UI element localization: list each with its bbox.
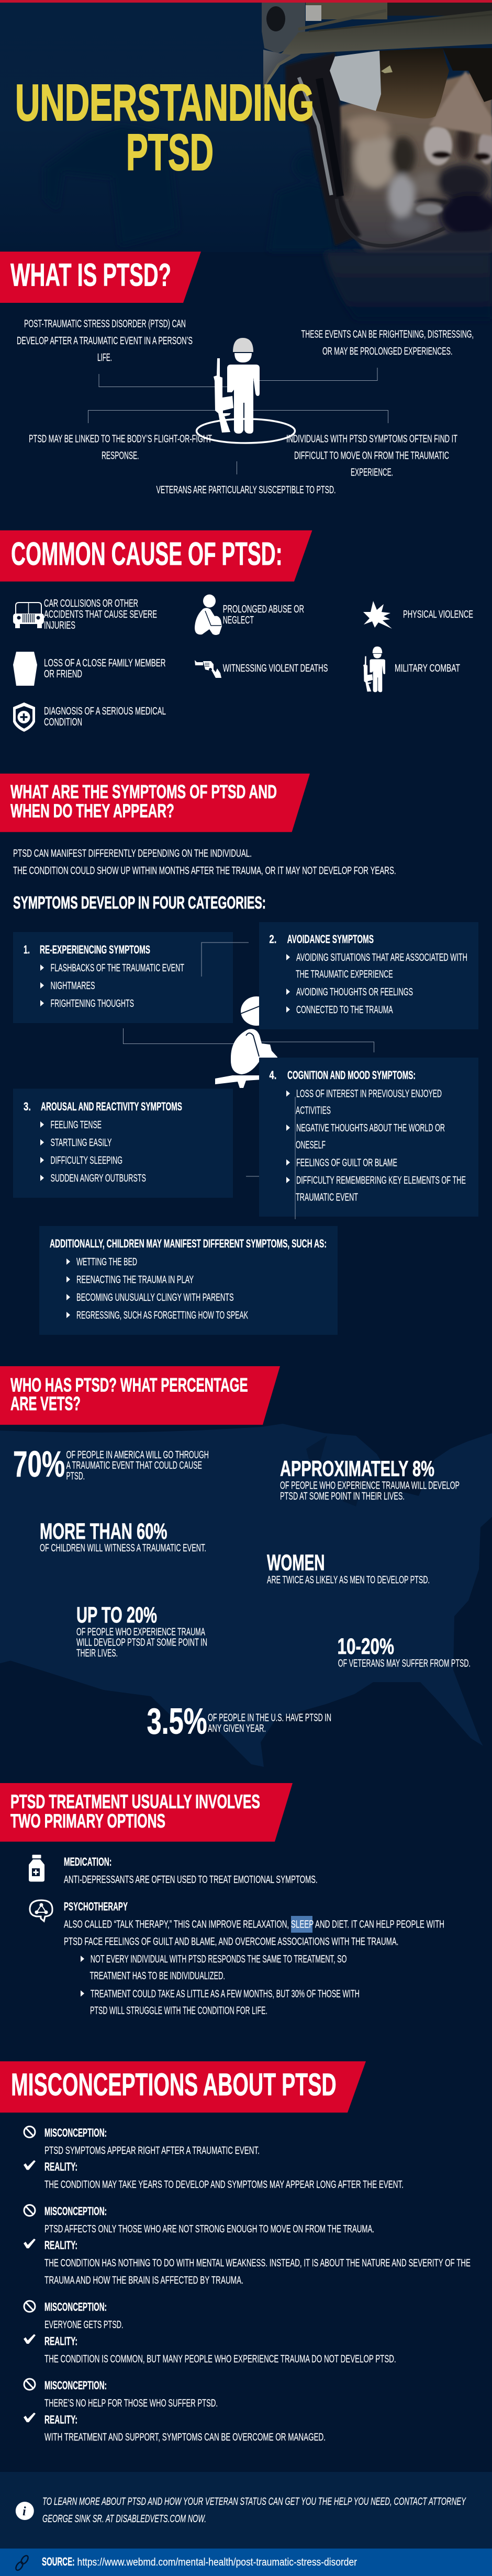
panel: arousal and reactivity symptoms xyxy=(13,1089,233,1198)
misconception label: MISCONCEPTION: xyxy=(44,2379,107,2392)
heading: treatment: TWO PRIMARY OPTIONS xyxy=(10,1810,165,1832)
stat: approximately 8 percent: PTSD AT SOME POINT IN THEIR LIVES. xyxy=(280,1490,405,1502)
panel title: AVOIDANCE SYMPTOMS xyxy=(287,933,374,946)
text: loss of family: OR FRIEND xyxy=(44,668,82,680)
misconception label: MISCONCEPTION: xyxy=(44,2126,107,2139)
symptom list: ACTIVITIES xyxy=(296,1104,331,1116)
heading: treatment xyxy=(0,1783,293,1842)
text: diagnosis: DIAGNOSIS OF A SERIOUS MEDICAL xyxy=(44,705,166,717)
reality text: TRAUMA AND HOW THE BRAIN IS AFFECTED BY TRAUMA. xyxy=(44,2274,243,2286)
source bar xyxy=(0,2548,492,2576)
reality label: REALITY: xyxy=(44,2413,77,2426)
text: events xyxy=(301,328,474,357)
connector line xyxy=(202,943,249,977)
face base xyxy=(335,68,492,252)
connector lines xyxy=(124,1028,374,1176)
panel title: 3. xyxy=(24,1100,31,1113)
text: military combat: MILITARY COMBAT xyxy=(395,662,460,674)
misconception 3 xyxy=(24,2300,396,2365)
icon: brain xyxy=(30,1900,52,1921)
symptom list: REGRESSING, SUCH AS FORGETTING HOW TO SPEAK xyxy=(76,1309,248,1321)
reality label: REALITY: xyxy=(44,2239,77,2252)
text: flight or fight: RESPONSE. xyxy=(102,450,139,461)
text: diagnosis: CONDITION xyxy=(44,716,82,728)
stat: 70 percent: 70% xyxy=(13,1444,65,1484)
text: car collisions xyxy=(44,597,157,631)
icon: prohibited xyxy=(24,2379,35,2390)
nose bridge skin xyxy=(429,71,492,136)
text: intro xyxy=(13,847,396,877)
heading: who has PTSD xyxy=(0,1366,280,1425)
helmet cord xyxy=(337,199,445,246)
source text: SOURCE: xyxy=(42,2555,75,2568)
stat: 3.5 percent: OF PEOPLE IN THE U.S. HAVE PTSD IN xyxy=(208,1712,331,1724)
icon: info: i xyxy=(23,2505,26,2518)
section: common causes xyxy=(0,530,473,732)
stat: women: WOMEN xyxy=(267,1550,325,1575)
symptom list: REENACTING THE TRAUMA IN PLAY xyxy=(76,1274,194,1286)
heading: treatment: PTSD TREATMENT USUALLY INVOLVES xyxy=(10,1791,260,1812)
icon: info xyxy=(16,2502,34,2520)
misconception text: THERE’S NO HELP FOR THOSE WHO SUFFER PTSD. xyxy=(44,2397,218,2409)
reality label: REALITY: xyxy=(44,2335,77,2347)
icon: sitting person xyxy=(195,594,222,635)
stat: up to 20 percent: WILL DEVELOP PTSD AT SOME POINT IN xyxy=(76,1636,207,1649)
lens glare patch xyxy=(330,51,381,111)
icon: jeep xyxy=(13,603,44,628)
text: medication: MEDICATION: xyxy=(64,1855,111,1868)
symptom list: DIFFICULTY SLEEPING xyxy=(50,1154,122,1166)
heading: who has PTSD: WHO HAS PTSD? WHAT PERCENTAGE xyxy=(10,1374,248,1395)
top red bar xyxy=(0,0,492,3)
text: prolonged abuse: NEGLECT xyxy=(223,614,254,626)
icon: check xyxy=(24,2160,36,2170)
helmet cords xyxy=(298,10,386,29)
text: car collisions: CAR COLLISIONS OR OTHER xyxy=(44,597,138,609)
stat: 10-20 percent: 10-20% xyxy=(337,1634,394,1659)
text: flight or fight: PTSD MAY BE LINKED TO THE BODY’S FLIGHT-OR-FIGHT xyxy=(29,433,212,445)
chin strap xyxy=(299,77,331,195)
text: witnessing violent deaths: WITNESSING VIOLENT DEATHS xyxy=(223,662,328,674)
panel title xyxy=(269,933,374,946)
helmet velcro patch xyxy=(306,3,387,19)
right lens and bridge xyxy=(443,48,492,102)
icon: coffin xyxy=(13,652,37,686)
text: medication: ANTI-DEPRESSANTS ARE OFTEN USED TO TREAT EMOTIONAL SYMPTOMS. xyxy=(64,1874,318,1886)
panel title: 1. xyxy=(24,943,30,956)
highlight: sleep xyxy=(291,1916,312,1933)
misconception 2 xyxy=(24,2205,471,2286)
heading: symptoms xyxy=(0,774,310,832)
icon: prohibited xyxy=(24,2127,35,2137)
connector line xyxy=(295,1097,296,1219)
text: flight or fight xyxy=(29,433,212,461)
panel: cognition and mood symptoms xyxy=(259,1058,478,1219)
panel title xyxy=(269,1069,416,1082)
helmet top dark xyxy=(387,3,492,16)
icon: medical shield xyxy=(13,702,35,732)
heading: who has PTSD: ARE VETS? xyxy=(10,1393,81,1414)
text: definition: POST-TRAUMATIC STRESS DISORDER (PTSD) CAN xyxy=(24,318,186,330)
symptom list: BECOMING UNUSUALLY CLINGY WITH PARENTS xyxy=(76,1291,234,1303)
title: UNDERSTANDING xyxy=(15,74,314,131)
symptom list: AVOIDING THOUGHTS OR FEELINGS xyxy=(296,986,413,998)
treatment notes list xyxy=(81,1953,360,2016)
panel: avoidance symptoms xyxy=(259,922,478,1029)
text: prolonged abuse xyxy=(223,603,304,626)
neck under cord xyxy=(351,230,492,252)
hero photo: soldier face with helmet xyxy=(262,3,492,319)
heading: what is PTSD: WHAT IS PTSD? xyxy=(10,257,171,293)
misconception label: MISCONCEPTION: xyxy=(44,2205,107,2218)
icon: link xyxy=(15,2555,29,2571)
symptom list: FRIGHTENING THOUGHTS xyxy=(50,997,134,1009)
section: symptoms xyxy=(0,774,478,1335)
text: definition: LIFE. xyxy=(97,351,112,364)
stat: up to 20 percent: UP TO 20% xyxy=(76,1603,157,1628)
callout text: GEORGE SINK SR. AT DISABLEDVETS.COM NOW. xyxy=(42,2513,206,2525)
neck shadow below photo xyxy=(325,252,492,319)
panel: children symptoms xyxy=(39,1226,338,1335)
symptom list: FEELINGS OF GUILT OR BLAME xyxy=(296,1156,397,1168)
misconception text: PTSD SYMPTOMS APPEAR RIGHT AFTER A TRAUMATIC EVENT. xyxy=(44,2144,260,2157)
panel title: COGNITION AND MOOD SYMPTOMS: xyxy=(287,1069,416,1082)
heading: misconceptions xyxy=(0,2061,366,2113)
helmet rail mount xyxy=(262,3,305,53)
background map of the US xyxy=(0,1424,492,1767)
symptom list xyxy=(286,951,467,1016)
footer callout xyxy=(0,2472,492,2549)
heading: symptoms: WHAT ARE THE SYMPTOMS OF PTSD AND xyxy=(10,781,277,802)
title: PTSD xyxy=(126,123,214,181)
icon: medicine bottle xyxy=(29,1855,44,1882)
panel title: RE-EXPERIENCING SYMPTOMS xyxy=(40,943,150,956)
stat: women xyxy=(267,1550,430,1586)
text: medication xyxy=(64,1855,318,1886)
stat: up to 20 percent xyxy=(76,1603,207,1659)
icon: soldier on circle xyxy=(197,338,295,443)
reality label: REALITY: xyxy=(44,2160,77,2173)
text: psychotherapy: PSYCHOTHERAPY xyxy=(64,1900,128,1913)
chin strap dark xyxy=(319,78,340,196)
text: definition: DEVELOP AFTER A TRAUMATIC EVENT IN A PERSON’S xyxy=(17,335,193,347)
panel: re-experiencing symptoms xyxy=(13,932,249,1023)
treatment notes list: NOT EVERY INDIVIDUAL WITH PTSD RESPONDS THE SAME TO TREATMENT, SO xyxy=(91,1953,346,1965)
section: what is PTSD xyxy=(0,252,474,496)
misconception text: EVERYONE GETS PTSD. xyxy=(44,2319,124,2331)
symptom list: THE TRAUMATIC EXPERIENCE xyxy=(296,968,393,980)
hero background xyxy=(0,0,492,252)
symptom list: FLASHBACKS OF THE TRAUMATIC EVENT xyxy=(50,962,184,974)
lips xyxy=(416,203,443,215)
stat: up to 20 percent: THEIR LIVES. xyxy=(76,1647,118,1659)
misconception 1 xyxy=(24,2126,404,2191)
treatment notes list: PTSD WILL STRUGGLE WITH THE CONDITION FOR LIFE. xyxy=(90,2004,267,2016)
stat: 70 percent: A TRAUMATIC EVENT THAT COULD CAUSE xyxy=(66,1459,202,1471)
section: who has PTSD xyxy=(0,1366,492,1767)
text: difficult to move on xyxy=(286,433,457,478)
stat: 70 percent xyxy=(13,1444,209,1484)
text: psychotherapy xyxy=(64,1900,444,1948)
left side inner dark helmet liner xyxy=(285,52,361,246)
text: veterans: VETERANS ARE PARTICULARLY SUSCEPTIBLE TO PTSD. xyxy=(156,484,336,496)
symptom list: ONESELF xyxy=(296,1139,326,1151)
symptom list xyxy=(66,1256,248,1321)
helmet side guard xyxy=(263,50,291,89)
map: great lakes xyxy=(306,1436,403,1506)
text: difficult to move on: EXPERIENCE. xyxy=(351,467,393,478)
stat: 3.5 percent: 3.5% xyxy=(147,1701,207,1742)
text: car collisions: ACCIDENTS THAT CAUSE SEVERE xyxy=(44,608,157,620)
eye glint xyxy=(381,65,393,73)
icon: check xyxy=(24,2413,36,2422)
symptom list xyxy=(40,962,184,1009)
heading: common cause xyxy=(0,530,312,582)
stat: 3.5 percent: ANY GIVEN YEAR. xyxy=(208,1722,266,1734)
panel title: AROUSAL AND REACTIVITY SYMPTOMS xyxy=(41,1100,182,1113)
panel title: 4. xyxy=(269,1069,276,1082)
connector lines xyxy=(88,368,388,474)
treatment notes list: TREATMENT HAS TO BE INDIVIDUALIZED. xyxy=(90,1970,225,1982)
symptom list: STARTLING EASILY xyxy=(50,1137,112,1149)
hero banner xyxy=(0,0,492,319)
misconception label: MISCONCEPTION: xyxy=(44,2300,107,2313)
stat: 3.5 percent xyxy=(147,1701,331,1742)
nose xyxy=(424,126,452,165)
heading: symptoms: WHEN DO THEY APPEAR? xyxy=(10,800,174,822)
stat: more than 60 percent xyxy=(40,1519,206,1554)
icon: soldier small xyxy=(363,646,385,692)
reality text: WITH TREATMENT AND SUPPORT, SYMPTOMS CAN BE OVERCOME OR MANAGED. xyxy=(44,2431,326,2443)
panel title xyxy=(24,1100,182,1113)
misconception 4 xyxy=(24,2379,326,2443)
sunglass lens xyxy=(376,48,449,118)
text: prolonged abuse: PROLONGED ABUSE OR xyxy=(223,603,304,615)
symptom list: TRAUMATIC EVENT xyxy=(296,1191,358,1204)
reality text xyxy=(44,2257,471,2286)
text: car collisions: INJURIES xyxy=(44,619,75,631)
heading: common cause: COMMON CAUSE OF PTSD: xyxy=(11,536,283,572)
stat: 70 percent: OF PEOPLE IN AMERICA WILL GO THROUGH xyxy=(66,1449,209,1461)
background soldier silhouettes xyxy=(44,126,335,251)
text: loss of family xyxy=(44,657,165,680)
section: treatment xyxy=(0,1783,444,2016)
cheek highlights and shadows xyxy=(354,131,396,188)
icon: prohibited xyxy=(24,2205,35,2216)
icon: revolver xyxy=(195,660,221,678)
stat: 70 percent: PTSD. xyxy=(66,1470,85,1482)
stat: more than 60 percent: OF CHILDREN WILL WITNESS A TRAUMATIC EVENT. xyxy=(40,1542,206,1554)
icon: check xyxy=(24,2334,36,2344)
icon: seated soldier xyxy=(215,996,277,1088)
heading: what is PTSD xyxy=(0,252,201,303)
panel title: 2. xyxy=(269,933,276,946)
stat: 10-20 percent xyxy=(337,1634,471,1670)
stat: more than 60 percent: MORE THAN 60% xyxy=(40,1519,167,1544)
symptom list: CONNECTED TO THE TRAUMA xyxy=(296,1004,393,1016)
symptom list: SUDDEN ANGRY OUTBURSTS xyxy=(50,1172,146,1184)
source text: https://www.webmd.com/mental-health/post-traumatic-stress-disorder xyxy=(77,2556,357,2568)
subheading: four categories: SYMPTOMS DEVELOP IN FOUR CATEGORIES: xyxy=(13,893,266,913)
panel title xyxy=(24,943,150,956)
icon: explosion star xyxy=(363,601,392,629)
symptom list: WETTING THE BED xyxy=(76,1256,137,1268)
symptom list: FEELING TENSE xyxy=(50,1119,102,1131)
panel title: ADDITIONALLY, CHILDREN MAY MANIFEST DIFFERENT SYMPTOMS, SUCH AS: xyxy=(50,1237,327,1250)
text: loss of family: LOSS OF A CLOSE FAMILY MEMBER xyxy=(44,657,165,669)
helmet rim xyxy=(263,10,492,89)
title xyxy=(15,74,314,181)
icon: prohibited xyxy=(24,2301,35,2312)
text: intro: PTSD CAN MANIFEST DIFFERENTLY DEPENDING ON THE INDIVIDUAL. xyxy=(13,847,252,859)
stat: up to 20 percent: OF PEOPLE WHO EXPERIENCE TRAUMA xyxy=(76,1626,205,1638)
symptom list: NIGHTMARES xyxy=(50,980,95,992)
text: definition xyxy=(17,318,193,364)
symptom list xyxy=(40,1119,146,1184)
icon: check xyxy=(24,2239,36,2248)
symptom list xyxy=(286,1088,466,1204)
callout text xyxy=(42,2495,466,2525)
section: misconceptions xyxy=(0,2061,471,2443)
text: diagnosis xyxy=(44,705,166,728)
stat: approximately 8 percent xyxy=(280,1456,460,1502)
